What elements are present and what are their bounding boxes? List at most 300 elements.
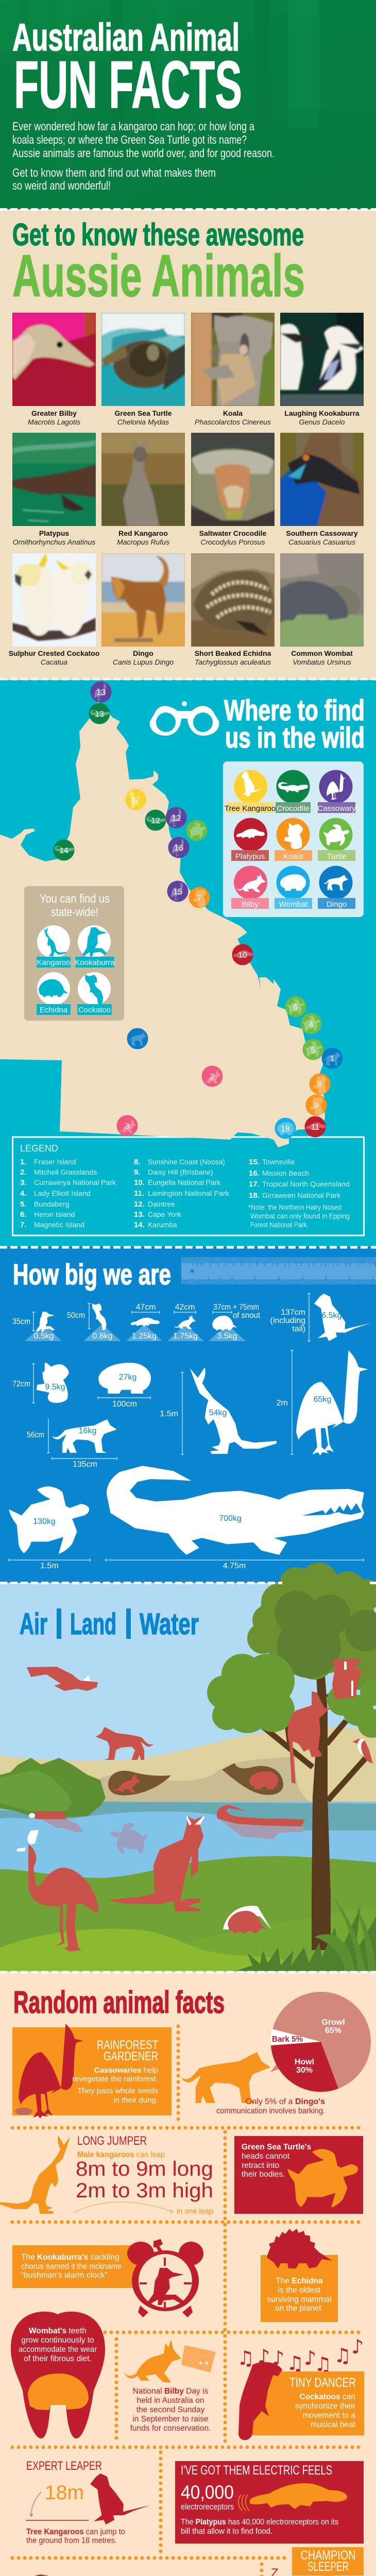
size: kangaroo: 1.5m bbox=[160, 1410, 178, 1418]
label: kookaburra: Genus Dacelo bbox=[299, 418, 345, 426]
legend text: *Note: the Northern Hairy Nosed bbox=[248, 1203, 341, 1211]
size: cassowary: 2m bbox=[277, 1399, 288, 1408]
size: turtle: 130kg bbox=[33, 1517, 56, 1526]
fact: echidna: surviving mammal bbox=[267, 2295, 331, 2304]
icon: music notes: ♫ bbox=[286, 2352, 304, 2375]
wombat burrow bbox=[222, 1763, 283, 1795]
legend text: Cape York bbox=[148, 1210, 182, 1218]
key: crocodile: Crocodile bbox=[277, 804, 310, 813]
fact: echidna: The Echidna bbox=[276, 2277, 323, 2285]
size: koala: 72cm bbox=[12, 1380, 30, 1388]
label: turtle: Green Sea Turtle bbox=[114, 409, 172, 417]
kookaburra on branch bbox=[352, 1739, 373, 1764]
marker 16 cassowary bbox=[168, 837, 190, 858]
fact: electric feels bbox=[175, 2461, 364, 2544]
size: koala: 9.5kg bbox=[45, 1383, 65, 1392]
icon: kangaroo bbox=[37, 925, 71, 968]
fact: expert leaper: 18m bbox=[45, 2482, 84, 2504]
key: bilby: Bilby bbox=[242, 900, 259, 909]
marker 10 platypus: 10 bbox=[238, 951, 247, 960]
fact: national bilby day: funds for conservation. bbox=[130, 2424, 211, 2433]
intro text: koala sleeps; or where the Green Sea Turtle got its name? bbox=[12, 133, 247, 146]
bilby burrow bbox=[108, 1771, 171, 1795]
panel: random animal facts bbox=[0, 1972, 376, 2576]
key: platypus: Platypus bbox=[235, 852, 265, 861]
legend text: 15. bbox=[249, 1158, 260, 1166]
icon: echidna: Echidna bbox=[40, 1006, 68, 1014]
legend text: Magnetic Island bbox=[34, 1221, 84, 1229]
size: echidna bbox=[209, 1303, 261, 1341]
marker 13 crocodile bbox=[89, 703, 110, 724]
size: kangaroo bbox=[160, 1367, 277, 1454]
marker 9 koala bbox=[306, 1094, 327, 1116]
key: koala: Koala bbox=[283, 852, 303, 861]
fact: electric feels: bill that allow it to find food. bbox=[181, 2527, 272, 2536]
marker turtle bbox=[186, 820, 207, 841]
label: red kangaroo: Red Kangaroo bbox=[118, 529, 168, 537]
fact: champion sleeper: CHAMPION bbox=[301, 2548, 355, 2563]
intro text: so weird and wonderful! bbox=[12, 179, 111, 192]
legend text: Mitchell Grasslands bbox=[34, 1168, 97, 1176]
legend text: 4. bbox=[20, 1189, 27, 1198]
legend text: Karumba bbox=[148, 1221, 177, 1229]
fact: tiny dancer: Cockatoos can bbox=[299, 2393, 355, 2401]
fact: dingo communication pie chart: 30% bbox=[296, 2066, 313, 2075]
marker 15 cassowary: 15 bbox=[173, 888, 182, 896]
size: tree kangaroo: 6.5kg bbox=[321, 1311, 342, 1320]
marker 17 tree kangaroo: 17 bbox=[131, 796, 140, 805]
title: Australian Animal bbox=[12, 15, 240, 59]
marker 6 turtle: 6 bbox=[294, 1003, 298, 1012]
marker 1 dingo: 1 bbox=[330, 1055, 335, 1063]
key: tree kangaroo: Tree Kangaroo bbox=[225, 804, 276, 813]
legend text: 10. bbox=[134, 1178, 145, 1187]
marker 16 cassowary: 16 bbox=[174, 844, 183, 853]
fact: wombat teeth: Wombat's teeth bbox=[29, 2327, 87, 2335]
legend text: 13. bbox=[134, 1210, 145, 1219]
fact: champion sleeper bbox=[271, 2547, 364, 2576]
ruler bbox=[181, 1260, 376, 1282]
fact: kookaburra alarm clock: The Kookaburra's cackling bbox=[21, 2253, 119, 2262]
fact: long jumper: Male kangaroos can leap bbox=[77, 2150, 165, 2159]
size: dingo: 135cm bbox=[73, 1460, 97, 1469]
size: kookaburra bbox=[12, 1312, 62, 1341]
size: platypus bbox=[126, 1303, 162, 1341]
size: platypus: 1.25kg bbox=[132, 1332, 157, 1341]
photo: southern cassowary bbox=[280, 433, 364, 526]
legend text: LEGEND bbox=[20, 1143, 58, 1154]
title bbox=[12, 15, 242, 122]
photo: common wombat bbox=[280, 553, 364, 647]
heading: air land water: Land bbox=[70, 1607, 116, 1641]
fact: wombat teeth: of their fibrous diet. bbox=[24, 2354, 92, 2363]
lake shallows bbox=[0, 1802, 376, 1831]
size: wombat: 27kg bbox=[119, 1373, 136, 1382]
marker 3 bilby bbox=[116, 1115, 138, 1137]
legend text: Fraser Island bbox=[34, 1158, 76, 1166]
legend frame bbox=[12, 1137, 364, 1235]
intro text: Aussie animals are famous the world over, and for good reason. bbox=[12, 146, 275, 160]
size: bilby: 1.75kg bbox=[173, 1332, 198, 1341]
fact: green sea turtle bbox=[234, 2136, 363, 2214]
photo: dingo bbox=[101, 553, 185, 647]
size: crocodile: 4.75m bbox=[223, 1562, 246, 1570]
marker 7 koala bbox=[189, 887, 210, 908]
size: wombat: 100cm bbox=[112, 1400, 137, 1409]
fact: tiny dancer: musical beat bbox=[311, 2420, 356, 2429]
big kangaroo bbox=[108, 1816, 204, 1911]
key: cassowary bbox=[317, 770, 356, 813]
fact: tiny dancer: synchronize their bbox=[295, 2402, 355, 2411]
fact: national bilby day: the second Sunday bbox=[136, 2405, 205, 2414]
marker 18 wombat bbox=[275, 1118, 296, 1139]
marker 13 crocodile: 13 bbox=[95, 710, 104, 719]
marker 17 tree kangaroo bbox=[125, 789, 146, 810]
fact: dingo communication pie chart: Growl bbox=[321, 2018, 345, 2027]
label: cassowary: Southern Cassowary bbox=[286, 529, 358, 537]
photo: short beaked echidna bbox=[191, 553, 275, 647]
fact: green sea turtle: their bodies. bbox=[242, 2170, 285, 2179]
size: tree kangaroo: (including bbox=[270, 1316, 305, 1325]
label: cockatoo bbox=[9, 649, 99, 666]
fact: kookaburra alarm clock: chorus earned it the nickname bbox=[21, 2262, 122, 2271]
legend text: 17. bbox=[249, 1180, 260, 1189]
heading: random animal facts: Random animal facts bbox=[13, 1985, 225, 2020]
marker 4 turtle: 4 bbox=[309, 1020, 314, 1029]
ruler: 1cm 2 3 4 5 6 7 8 9 10 11 12 13 14 15 16 17 18 bbox=[192, 1262, 376, 1267]
legend text: 3. bbox=[20, 1178, 27, 1187]
tree trunk and branches bbox=[260, 1676, 367, 1950]
size: dingo: 16kg bbox=[79, 1427, 96, 1435]
label: koala: Phascolarctos Cinereus bbox=[195, 418, 271, 426]
panel: how big we are bbox=[0, 1247, 376, 1583]
icon: music notes: ♪ bbox=[351, 2335, 364, 2358]
fact: tiny dancer: movement to a bbox=[302, 2411, 355, 2420]
label: cockatoo: Sulphur Crested Cockatoo bbox=[9, 649, 99, 657]
crocodile in water bbox=[217, 1805, 305, 1839]
koala in tree bbox=[332, 1659, 362, 1699]
legend text: Heron Island bbox=[34, 1210, 75, 1218]
label: cockatoo: Cacatua bbox=[41, 658, 67, 666]
fact: national bilby day bbox=[124, 2340, 216, 2433]
key: dingo bbox=[318, 866, 355, 909]
fact: rainforest gardener: RAINFOREST bbox=[97, 2038, 158, 2052]
grass mid tone bbox=[180, 1906, 376, 1971]
panel: state-wide animals: You can find us bbox=[40, 892, 110, 905]
fact: electric feels: electroreceptors bbox=[181, 2502, 234, 2512]
size: kookaburra: 35cm bbox=[12, 1317, 30, 1326]
panel: get to know the animals bbox=[0, 209, 376, 680]
legend text: 14. bbox=[134, 1221, 145, 1229]
panel: air land water scene bbox=[0, 1563, 376, 1972]
label: crocodile bbox=[199, 529, 267, 546]
legend text: Bundaberg bbox=[34, 1200, 70, 1208]
key: cassowary: Cassowary bbox=[317, 804, 356, 813]
map of Queensland bbox=[0, 702, 325, 1147]
fact: large and in charge bbox=[5, 2574, 255, 2576]
label: red kangaroo: Macropus Rufus bbox=[117, 538, 169, 546]
icon: binoculars bbox=[150, 701, 219, 736]
size: dingo bbox=[27, 1418, 117, 1469]
marker 18 wombat: 18 bbox=[281, 1125, 290, 1133]
fact: electric feels: The Platypus has 40,000 electroreceptors on its bbox=[181, 2518, 338, 2527]
photo: laughing kookaburra bbox=[280, 313, 364, 406]
legend text: 1. bbox=[20, 1158, 27, 1166]
size: echidna: 37cm + 75mm bbox=[213, 1303, 259, 1312]
label: dingo: Dingo bbox=[133, 649, 153, 657]
platypus in water bbox=[29, 1811, 83, 1832]
fact: green sea turtle: Green Sea Turtle's bbox=[242, 2143, 311, 2151]
size: kookaburra: 0.5kg bbox=[33, 1332, 54, 1341]
fact: dingo communication pie chart: Howl bbox=[295, 2058, 314, 2066]
marker 7 koala: 7 bbox=[197, 894, 202, 903]
fact: long jumper: 2m to 3m high bbox=[76, 2179, 213, 2202]
fact: tiny dancer: TINY DANCER bbox=[289, 2376, 356, 2390]
fact: wombat teeth: grow continuously to bbox=[21, 2336, 94, 2345]
panel: species key bbox=[223, 761, 364, 917]
shaded sand bbox=[98, 1757, 312, 1803]
heading: how big we are: How big we are bbox=[13, 1258, 171, 1291]
label: koala: Koala bbox=[223, 409, 243, 417]
fact: expert leaper: the ground from 18 metres. bbox=[26, 2536, 117, 2545]
map markers bbox=[54, 681, 343, 1139]
photo: koala bbox=[191, 313, 275, 406]
fact: dingo communication pie chart: Bark 5% bbox=[272, 2035, 303, 2044]
label: cassowary: Casuarius Casuarius bbox=[288, 538, 355, 546]
heading: air land water: Water bbox=[140, 1607, 199, 1641]
lake bbox=[0, 1802, 376, 1889]
size: kangaroo: 54kg bbox=[209, 1409, 227, 1417]
marker 14 crocodile: 14 bbox=[59, 846, 69, 855]
foreground hill bbox=[0, 1929, 309, 1971]
size: cockatoo: 50cm bbox=[67, 1311, 85, 1320]
label: echidna bbox=[195, 649, 271, 666]
size: echidna: of snout bbox=[233, 1311, 261, 1320]
label: turtle: Chelonia Mydas bbox=[117, 418, 169, 426]
fact: rainforest gardener: They pass whole seeds bbox=[77, 2087, 158, 2095]
echidna in scene bbox=[223, 1906, 271, 1934]
label: cassowary bbox=[286, 529, 358, 546]
marker 13 cassowary bbox=[91, 681, 111, 703]
intro text bbox=[12, 120, 275, 192]
label: wombat: Common Wombat bbox=[291, 649, 353, 657]
key: dingo: Dingo bbox=[327, 900, 347, 909]
label: bilby: Greater Bilby bbox=[31, 409, 77, 417]
fact: national bilby day: ★ ★ bbox=[198, 2361, 209, 2366]
marker 12 cassowary: 12 bbox=[172, 814, 181, 823]
marker 4 turtle bbox=[301, 1013, 321, 1035]
panel: hero intro bbox=[0, 0, 376, 209]
marker 8 koala bbox=[309, 1074, 331, 1094]
grass bbox=[0, 1856, 376, 1971]
marker 2 bilby: 2 bbox=[210, 1073, 215, 1081]
key: bilby bbox=[231, 866, 269, 909]
legend text: Forest National Park. bbox=[250, 1221, 309, 1229]
legend text: 11. bbox=[134, 1189, 144, 1198]
photo: platypus bbox=[12, 433, 96, 526]
key: koala bbox=[275, 818, 312, 861]
key: platypus bbox=[231, 818, 269, 861]
size: crocodile bbox=[106, 1466, 364, 1570]
icon: music notes bbox=[237, 2335, 364, 2376]
label: kookaburra bbox=[284, 409, 360, 426]
fact: champion sleeper: SLEEPER bbox=[307, 2560, 349, 2574]
size: cockatoo: 0.8kg bbox=[92, 1332, 113, 1341]
legend text: 9. bbox=[134, 1168, 141, 1177]
grass clump bbox=[234, 1896, 376, 1971]
marker 2 bilby bbox=[202, 1065, 223, 1087]
legend text: 12. bbox=[134, 1200, 145, 1209]
fact: expert leaper bbox=[26, 2459, 151, 2545]
icon: music notes: ♪ bbox=[258, 2345, 270, 2368]
size: echidna: 3.5kg bbox=[217, 1332, 237, 1341]
heading: air land water bbox=[20, 1607, 199, 1641]
label: crocodile: Crocodylus Porosus bbox=[200, 538, 265, 546]
fact: dingo communication pie chart: communication involves barking. bbox=[216, 2107, 325, 2115]
marker 1 dingo bbox=[321, 1048, 343, 1069]
intro text: Get to know them and find out what makes them bbox=[12, 166, 216, 179]
marker 5 turtle: 5 bbox=[311, 1046, 316, 1055]
fact: electric feels: 40,000 bbox=[181, 2482, 234, 2503]
size: turtle bbox=[9, 1486, 90, 1570]
heading: where to find us in the wild bbox=[224, 694, 365, 754]
fact: rainforest gardener: in their dung. bbox=[113, 2096, 158, 2105]
legend text: Lamington National Park bbox=[148, 1189, 230, 1197]
label: bilby: Macrotis Lagotis bbox=[28, 418, 80, 426]
label: kookaburra: Laughing Kookaburra bbox=[284, 409, 360, 417]
fact: national bilby day: in September to raise bbox=[132, 2415, 209, 2424]
marker 10 platypus bbox=[232, 944, 253, 965]
marker 11 platypus: 11 bbox=[311, 1123, 319, 1132]
photo: red kangaroo bbox=[101, 433, 185, 526]
marker 5 turtle bbox=[303, 1039, 323, 1060]
intro text: Ever wondered how far a kangaroo can hop; or how long a bbox=[12, 120, 254, 133]
label: platypus: Platypus bbox=[39, 529, 69, 537]
legend text: Eungella National Park bbox=[148, 1178, 221, 1187]
fact: kookaburra alarm clock bbox=[12, 2239, 203, 2317]
label: bilby bbox=[28, 409, 80, 426]
icon: kookaburra: Kookaburra bbox=[75, 958, 115, 967]
fact: dingo communication pie chart: Only 5% of a Dingo's bbox=[246, 2097, 325, 2106]
marker 3 bilby: 3 bbox=[125, 1122, 130, 1131]
panel: where to find us map bbox=[0, 680, 376, 1247]
icon: music notes: ♪ bbox=[272, 2347, 284, 2369]
bush bbox=[0, 1758, 106, 1818]
marker 15 cassowary bbox=[167, 881, 189, 902]
photo: greater bilby bbox=[12, 313, 96, 406]
marker 14 crocodile bbox=[54, 840, 74, 860]
size: crocodile: 700kg bbox=[219, 1514, 242, 1523]
label: wombat bbox=[291, 649, 353, 666]
legend text: Tropical North Queensland bbox=[262, 1180, 350, 1188]
legend text: 6. bbox=[20, 1210, 27, 1219]
fact: tiny dancer bbox=[237, 2335, 364, 2440]
key: turtle bbox=[318, 818, 355, 861]
panel: state-wide animals bbox=[24, 886, 124, 1021]
fact: long jumper: 8m to 9m long bbox=[76, 2158, 213, 2180]
legend text: Lady Elliott Island bbox=[34, 1189, 91, 1197]
legend text: 7. bbox=[20, 1221, 27, 1229]
key: wombat bbox=[275, 866, 312, 909]
fact: kookaburra alarm clock: “bushman's alarm clock” bbox=[21, 2271, 107, 2280]
legend text: Sunshine Coast (Noosa) bbox=[148, 1158, 225, 1166]
label: dingo bbox=[113, 649, 174, 666]
marker 12 crocodile bbox=[145, 810, 166, 831]
legend text: Wombat can only found in Epping bbox=[250, 1212, 350, 1220]
bird flying bbox=[27, 1667, 98, 1691]
label: platypus: Ornithorhynchus Anatinus bbox=[13, 538, 95, 546]
fact: long jumper bbox=[0, 2134, 213, 2216]
icon: music notes: ♫ bbox=[314, 2353, 332, 2376]
turtle underwater bbox=[111, 1823, 148, 1855]
fact: echidna: is the oldest bbox=[278, 2286, 321, 2295]
fact: long jumper: LONG JUMPER bbox=[77, 2134, 147, 2148]
icon: cockatoo bbox=[77, 972, 112, 1015]
size: wombat bbox=[98, 1363, 151, 1409]
fact: expert leaper: EXPERT LEAPER bbox=[26, 2459, 102, 2473]
hill bbox=[0, 1727, 376, 1808]
fact: rainforest gardener: revegetate the rainforest. bbox=[72, 2075, 158, 2083]
icon: kangaroo: Kangaroo bbox=[37, 958, 71, 967]
fact: national bilby day: held in Australia on bbox=[137, 2396, 204, 2405]
cassowary in scene bbox=[16, 1830, 99, 1952]
label: dingo: Canis Lupus Dingo bbox=[113, 658, 174, 666]
fact: echidna: on the planet. bbox=[275, 2304, 323, 2313]
marker 6 turtle bbox=[285, 996, 306, 1017]
fact: rainforest gardener: Cassowaries help bbox=[94, 2066, 158, 2075]
icon: music notes: ♫ bbox=[334, 2344, 351, 2367]
legend text: Daintree bbox=[148, 1200, 175, 1208]
size: koala bbox=[12, 1363, 69, 1403]
icon: alarm clock bbox=[127, 2239, 203, 2317]
marker 11 platypus bbox=[305, 1116, 326, 1138]
legend text: Currawinya National Park bbox=[34, 1178, 116, 1187]
fact: green sea turtle: heads cannot bbox=[242, 2152, 290, 2161]
size: bilby: 42cm bbox=[175, 1303, 195, 1312]
size: tree kangaroo bbox=[270, 1294, 371, 1341]
label: turtle bbox=[114, 409, 172, 426]
legend text: 16. bbox=[249, 1169, 260, 1178]
legend text: 8. bbox=[134, 1158, 141, 1166]
icon: kookaburra bbox=[75, 925, 115, 968]
legend text: 2. bbox=[20, 1168, 27, 1177]
tree kangaroo on trunk bbox=[287, 1691, 331, 1784]
key: crocodile bbox=[276, 770, 311, 813]
ruler: 1in 2 3 4 5 6 7 bbox=[207, 1276, 374, 1281]
label: crocodile: Saltwater Crocodile bbox=[199, 529, 267, 537]
fact: wombat teeth bbox=[11, 2312, 105, 2438]
panel: state-wide animals: state-wide! bbox=[51, 905, 98, 919]
legend text: Townsville bbox=[262, 1158, 295, 1166]
marker dingo bbox=[127, 1028, 148, 1049]
photo: saltwater crocodile bbox=[191, 433, 275, 526]
size: tree kangaroo: tail) bbox=[292, 1325, 305, 1333]
label: platypus bbox=[13, 529, 95, 546]
icon: music notes: ♪ bbox=[304, 2347, 316, 2369]
icon: cockatoo: Cockatoo bbox=[78, 1006, 111, 1014]
size: tree kangaroo: 137cm bbox=[281, 1308, 305, 1317]
label: echidna: Tachyglossus aculeatus bbox=[195, 658, 271, 666]
size: cockatoo bbox=[67, 1303, 121, 1341]
marker 9 koala: 9 bbox=[314, 1101, 319, 1110]
key: tree kangaroo bbox=[225, 770, 276, 813]
label: wombat: Vombatus Ursinus bbox=[293, 658, 351, 666]
legend text: Daisy Hill (Brisbane) bbox=[148, 1168, 213, 1176]
icon: music notes: ♫ bbox=[237, 2347, 254, 2369]
marker 8 koala: 8 bbox=[318, 1080, 322, 1089]
marker 13 cassowary: 13 bbox=[96, 688, 106, 697]
heading: air land water: Air bbox=[20, 1607, 47, 1641]
